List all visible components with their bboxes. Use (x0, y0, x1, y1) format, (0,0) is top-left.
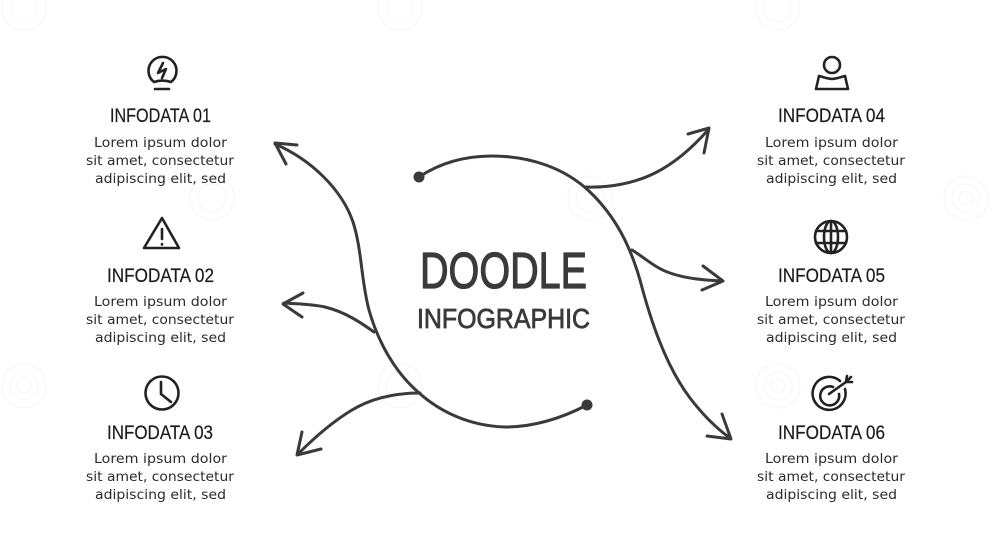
body text: adipiscing elit, sed (95, 172, 226, 187)
heading: INFODATA 05 (778, 266, 885, 287)
heading: INFODATA 03 (107, 423, 213, 444)
body text (757, 452, 906, 503)
branch arrow to Infodata 05 (632, 250, 723, 290)
body text: sit amet, consectetur (86, 470, 235, 485)
body text: Lorem ipsum dolor (765, 136, 899, 151)
body text (86, 295, 235, 346)
central title (417, 242, 590, 334)
central title: INFOGRAPHIC (417, 303, 590, 334)
body text: adipiscing elit, sed (95, 488, 226, 503)
block: Infodata 06 (757, 376, 906, 503)
branch arrow to Infodata 03 (297, 393, 420, 455)
body text: Lorem ipsum dolor (765, 295, 899, 310)
body text: adipiscing elit, sed (766, 172, 897, 187)
body text: Lorem ipsum dolor (765, 452, 899, 467)
body text: Lorem ipsum dolor (94, 295, 228, 310)
body text (757, 136, 906, 187)
block: Infodata 05 (757, 221, 906, 346)
icon: globe (815, 221, 847, 253)
body text (86, 136, 235, 187)
heading: INFODATA 01 (110, 106, 211, 127)
icon: light bulb (148, 57, 177, 89)
block: Infodata 04 (757, 57, 906, 187)
upper curve with arrow to Infodata 06 (414, 156, 731, 439)
heading: INFODATA 04 (778, 106, 885, 127)
icon: clock (146, 376, 178, 410)
body text (86, 452, 235, 503)
icon: warning triangle (144, 218, 179, 248)
central title: DOODLE (420, 242, 587, 299)
body text: Lorem ipsum dolor (94, 452, 228, 467)
icon: person (816, 57, 848, 89)
heading: INFODATA 06 (778, 423, 885, 444)
icon: target with arrow (813, 376, 852, 410)
heading: INFODATA 02 (107, 266, 214, 287)
central doodle diagram (275, 128, 731, 455)
body text: adipiscing elit, sed (95, 331, 226, 346)
block: Infodata 01 (86, 57, 235, 187)
body text: sit amet, consectetur (86, 313, 235, 328)
body text: sit amet, consectetur (86, 154, 235, 169)
block: Infodata 02 (86, 218, 235, 346)
lower curve with arrow to Infodata 01 (275, 143, 592, 427)
branch arrow to Infodata 04 (585, 128, 709, 187)
block: Infodata 03 (86, 376, 235, 503)
body text: sit amet, consectetur (757, 470, 906, 485)
body text (757, 295, 906, 346)
body text: adipiscing elit, sed (766, 331, 897, 346)
body text: Lorem ipsum dolor (94, 136, 228, 151)
body text: sit amet, consectetur (757, 154, 906, 169)
body text: sit amet, consectetur (757, 313, 906, 328)
branch arrow to Infodata 02 (283, 293, 374, 332)
body text: adipiscing elit, sed (766, 488, 897, 503)
